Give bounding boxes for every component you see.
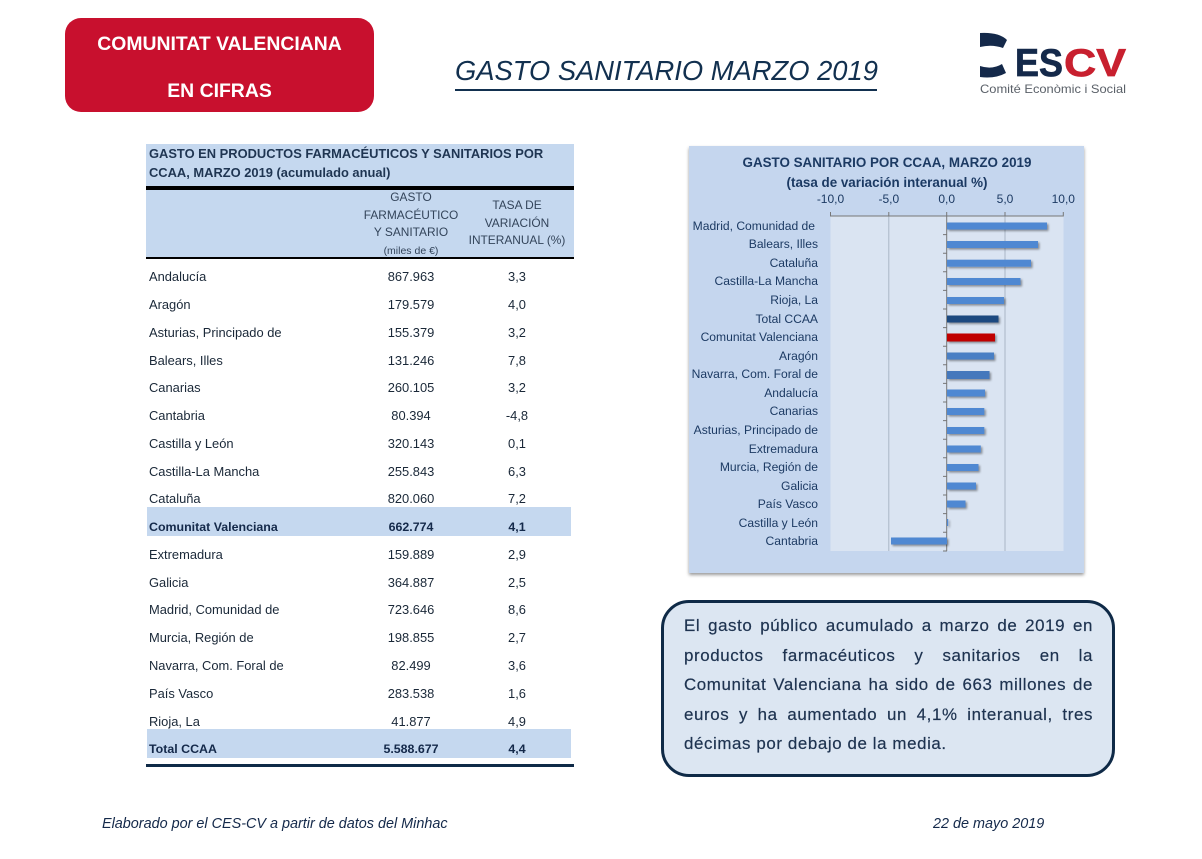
row: Navarra — [149, 658, 526, 673]
row: País Vasco: País Vasco — [149, 686, 213, 701]
column header: gasto — [364, 190, 458, 256]
category labels: País Vasco — [758, 497, 818, 511]
badge: Comunitat Valenciana en cifras: COMUNITAT VALENCIANA — [97, 33, 342, 55]
row: Asturias: 155.379 — [388, 325, 434, 340]
row: Extremadura: 2,9 — [508, 547, 526, 562]
bars — [891, 222, 1047, 544]
row: Aragón — [149, 297, 526, 312]
title: GASTO SANITARIO MARZO 2019 — [455, 55, 878, 86]
category labels: Cantabria — [766, 534, 818, 548]
row: Murcia: 198.855 — [388, 630, 434, 645]
row: Canarias: 260.105 — [388, 380, 434, 395]
chart title: (tasa de variación interanual %) — [787, 175, 987, 190]
category labels: Galicia — [781, 479, 818, 493]
footer source: Elaborado por el CES-CV a partir de datos del Minhac — [102, 816, 448, 832]
table header band — [146, 186, 574, 259]
category labels: Murcia, Región de — [720, 460, 818, 474]
row: Navarra: 82.499 — [391, 658, 431, 673]
row: Andalucía: 3,3 — [508, 269, 526, 284]
row: Balears: Balears, Illes — [149, 353, 223, 368]
column header: gasto: (miles de €) — [384, 244, 438, 256]
category labels: Castilla y León — [739, 516, 818, 530]
row: Asturias: 3,2 — [508, 325, 526, 340]
row: Cataluña: 820.060 — [388, 491, 434, 506]
row: Balears — [149, 353, 526, 368]
category labels: Balears, Illes — [749, 237, 818, 251]
row: Canarias — [149, 380, 526, 395]
logo: CES CV — [980, 32, 1126, 96]
row: Total CCAA: 5.588.677 — [383, 742, 439, 756]
row: Cataluña: 7,2 — [508, 491, 526, 506]
axis labels: 10,0 — [1052, 192, 1075, 206]
row: Aragón: 4,0 — [508, 297, 526, 312]
column header: tasa: TASA DE — [492, 198, 542, 212]
column header: gasto: GASTO — [390, 190, 432, 204]
row: Aragón: Aragón — [149, 297, 191, 312]
row: País Vasco: 283.538 — [388, 686, 434, 701]
row: Asturias: Asturias, Principado de — [149, 325, 282, 340]
row: País Vasco — [149, 686, 526, 701]
panel: bar chart — [687, 146, 1086, 577]
row: Total CCAA: 4,4 — [508, 742, 526, 756]
row: Cantabria: -4,8 — [506, 408, 528, 423]
row: Cantabria: Cantabria — [149, 408, 205, 423]
callout — [661, 600, 1115, 777]
category labels: Cataluña — [770, 256, 818, 270]
highlight: Comunitat Valenciana — [147, 507, 571, 536]
category labels: Navarra, Com. Foral de — [692, 367, 818, 381]
row: Castilla-La Mancha: 255.843 — [388, 464, 434, 479]
row: Aragón: 179.579 — [388, 297, 434, 312]
row: Canarias: Canarias — [149, 380, 201, 395]
row: Balears: 131.246 — [388, 353, 434, 368]
column header: tasa: VARIACIÓN — [485, 216, 549, 230]
category labels: Andalucía — [764, 386, 818, 400]
axis labels: 5,0 — [997, 192, 1014, 206]
row: Andalucía — [149, 269, 526, 284]
row: Rioja: Rioja, La — [149, 714, 200, 729]
column header: gasto: Y SANITARIO — [374, 225, 448, 239]
row: Comunitat Valenciana: 662.774 — [389, 520, 433, 534]
logo: CES CV: ES — [1015, 42, 1063, 85]
row: Madrid: Madrid, Comunidad de — [149, 602, 279, 617]
axis labels: -10,0 — [817, 192, 844, 206]
table title — [146, 144, 574, 186]
row: Murcia: 2,7 — [508, 630, 526, 645]
row: Comunitat Valenciana: 4,1 — [508, 520, 526, 534]
row: Comunitat Valenciana: Comunitat Valenciana — [149, 520, 278, 534]
callout text: productos farmacéuticos y sanitarios en la — [684, 646, 1093, 665]
table title: CCAA, MARZO 2019 (acumulado anual) — [149, 165, 390, 180]
callout text: décimas por debajo de la media. — [684, 734, 947, 753]
row: Navarra: Navarra, Com. Foral de — [149, 658, 284, 673]
row: Galicia: Galicia — [149, 575, 188, 590]
category labels: Castilla-La Mancha — [714, 274, 818, 288]
row: Andalucía: 867.963 — [388, 269, 434, 284]
row: Castilla-La Mancha: 6,3 — [508, 464, 526, 479]
row: Cantabria — [149, 408, 528, 423]
row: Total CCAA: Total CCAA — [149, 742, 217, 756]
table title: GASTO EN PRODUCTOS FARMACÉUTICOS Y SANITARIOS POR — [149, 146, 543, 161]
row: Rioja: 41.877 — [391, 714, 431, 729]
category labels: Total CCAA — [755, 312, 819, 326]
column header: tasa — [469, 198, 565, 247]
row: Galicia: 364.887 — [388, 575, 434, 590]
row: Canarias: 3,2 — [508, 380, 526, 395]
row: Andalucía: Andalucía — [149, 269, 206, 284]
axis labels: -5,0 — [878, 192, 899, 206]
panel: data table — [146, 144, 574, 767]
row: Asturias — [149, 325, 526, 340]
row: Madrid: 8,6 — [508, 602, 526, 617]
axis labels — [817, 192, 1075, 206]
row: Madrid: 723.646 — [388, 602, 434, 617]
highlight: Total CCAA — [147, 729, 571, 758]
callout text: euros y ha aumentado un 4,1% interanual, tres — [684, 705, 1093, 724]
row: Castilla y León: 0,1 — [508, 436, 526, 451]
row: Extremadura: 159.889 — [388, 547, 434, 562]
row: País Vasco: 1,6 — [508, 686, 526, 701]
row: Cataluña — [149, 491, 526, 506]
row: Rioja — [149, 714, 526, 729]
category labels: Madrid, Comunidad de — [693, 219, 815, 233]
table bottom rule — [146, 764, 574, 767]
column header: tasa: INTERANUAL (%) — [469, 233, 565, 247]
row: Navarra: 3,6 — [508, 658, 526, 673]
chart title — [743, 155, 1031, 190]
row: Comunitat Valenciana — [149, 520, 526, 534]
row: Castilla y León — [149, 436, 526, 451]
callout text: El gasto público acumulado a marzo de 2019 en — [684, 616, 1093, 635]
category labels: Rioja, La — [770, 293, 818, 307]
callout text — [684, 616, 1093, 753]
row: Madrid — [149, 602, 526, 617]
row: Galicia: 2,5 — [508, 575, 526, 590]
row: Castilla-La Mancha: Castilla-La Mancha — [149, 464, 259, 479]
category labels — [692, 219, 819, 548]
row: Galicia — [149, 575, 526, 590]
row: Cantabria: 80.394 — [391, 408, 431, 423]
footer date: 22 de mayo 2019 — [933, 816, 1044, 832]
category labels: Canarias — [770, 404, 818, 418]
badge: Comunitat Valenciana en cifras: EN CIFRAS — [167, 80, 272, 102]
row: Cataluña: Cataluña — [149, 491, 201, 506]
column header: gasto: FARMACÉUTICO — [364, 208, 458, 222]
row: Balears: 7,8 — [508, 353, 526, 368]
category labels: Extremadura — [749, 442, 818, 456]
row: Total CCAA — [149, 742, 526, 756]
category labels: Aragón — [779, 349, 818, 363]
category labels: Comunitat Valenciana — [701, 330, 818, 344]
row: Castilla y León: 320.143 — [388, 436, 434, 451]
badge: Comunitat Valenciana en cifras — [65, 18, 374, 112]
row: Murcia — [149, 630, 526, 645]
row: Murcia: Murcia, Región de — [149, 630, 254, 645]
row: Extremadura: Extremadura — [149, 547, 223, 562]
row: Extremadura — [149, 547, 526, 562]
axes — [830, 212, 1063, 551]
row: Rioja: 4,9 — [508, 714, 526, 729]
axis labels: 0,0 — [938, 192, 955, 206]
row: Castilla y León: Castilla y León — [149, 436, 234, 451]
logo: CES CV: Comité Econòmic i Social — [980, 82, 1126, 96]
callout text: Comunitat Valenciana ha sido de 663 millones de — [684, 675, 1093, 694]
chart title: GASTO SANITARIO POR CCAA, MARZO 2019 — [743, 155, 1031, 170]
logo: CES CV: CV — [1064, 42, 1126, 85]
category labels: Asturias, Principado de — [694, 423, 818, 437]
row: Castilla-La Mancha — [149, 464, 526, 479]
